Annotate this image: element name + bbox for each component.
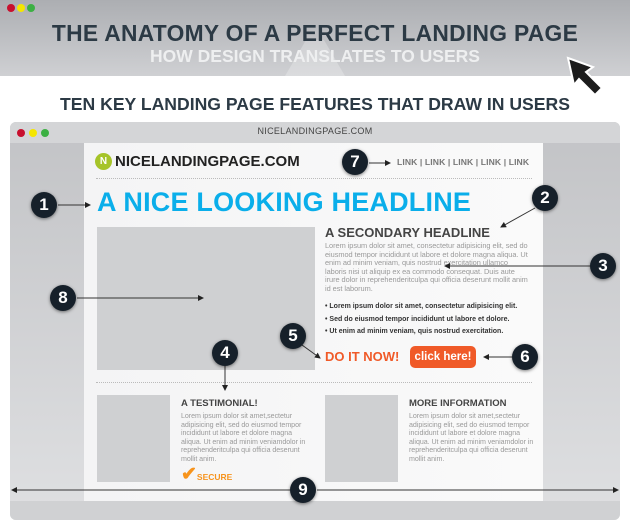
- badge 8: 8: [58, 288, 68, 307]
- runway: [285, 40, 345, 76]
- browser window: [10, 122, 620, 520]
- bullet list: • Sed do eiusmod tempor incididunt ut labore et dolore.: [325, 316, 509, 323]
- header band: [0, 0, 630, 76]
- badge 6: [512, 344, 538, 370]
- secure badge: ✔SECURE: [181, 464, 232, 485]
- secondary headline: A SECONDARY HEADLINE: [325, 225, 490, 240]
- testimonial: Lorem ipsum dolor sit amet,sectetur adipisicing elit, sed do eiusmod tempor incididunt ut labore et dolore magna aliqua. Ut enim ad minim veniamdolor in reprehenderitculpa qui officia deserunt mollit anim.: [181, 412, 305, 463]
- badge 2: 2: [540, 188, 550, 207]
- bottom bar: [10, 501, 620, 520]
- more information: MORE INFORMATION: [409, 398, 506, 409]
- nav links: LINK | LINK | LINK | LINK | LINK: [397, 157, 529, 167]
- title: THE ANATOMY OF A PERFECT LANDING PAGE: [52, 20, 578, 46]
- badge 5: [280, 323, 306, 349]
- testimonial: A TESTIMONIAL!: [181, 398, 258, 409]
- button: [410, 346, 476, 368]
- main headline: A NICE LOOKING HEADLINE: [97, 187, 471, 217]
- badge 3: 3: [598, 256, 608, 275]
- logo: N: [100, 156, 107, 167]
- more information: Lorem ipsum dolor sit amet,sectetur adipisicing elit, sed do eiusmod tempor incididunt ut labore et dolore magna aliqua. Ut enim ad minim veniamdolor in reprehenderitculpa qui officia deserunt mollit anim.: [409, 412, 533, 463]
- badge 5: 5: [288, 326, 298, 345]
- logo: NICELANDINGPAGE.COM: [115, 153, 300, 170]
- call to action text: DO IT NOW!: [325, 349, 399, 364]
- badge 1: [31, 192, 57, 218]
- bullet list: • Lorem ipsum dolor sit amet, consectetur adipisicing elit.: [325, 303, 517, 310]
- landing page panel: [84, 143, 543, 501]
- info image: [325, 395, 398, 482]
- icon: cursor arrow: [566, 56, 601, 94]
- badge 4: 4: [220, 343, 230, 362]
- browser bar: [10, 122, 620, 143]
- badge 7: [342, 149, 368, 175]
- hero image: [97, 227, 315, 370]
- bullet list: • Ut enim ad minim veniam, quis nostrud exercitation.: [325, 328, 503, 335]
- badge 6: 6: [520, 347, 530, 366]
- subtitle: HOW DESIGN TRANSLATES TO USERS: [150, 46, 480, 66]
- body text: Lorem ipsum dolor sit amet, consectetur adipisicing elit, sed do eiusmod tempor incididunt ut labore et dolore magna aliqua. Ut enim ad minim veniam, quis nostrud exercitation ullamco laboris nisi ut aliquip ex ea commodo consequat. Duis aute irure dolor in reprehenderitculpa qui officia deserunt mollit anim id est laborum.: [325, 241, 528, 292]
- badge 8: [50, 285, 76, 311]
- button: click here!: [415, 351, 471, 363]
- badge 9: [290, 477, 316, 503]
- badge 3: [590, 253, 616, 279]
- bullet list: [325, 302, 517, 335]
- badge 9: 9: [298, 480, 308, 499]
- badge 4: [212, 340, 238, 366]
- badge 1: 1: [39, 195, 49, 214]
- badge 2: [532, 185, 558, 211]
- badge 7: 7: [350, 152, 360, 171]
- section heading: TEN KEY LANDING PAGE FEATURES THAT DRAW IN USERS: [60, 94, 570, 114]
- browser bar: NICELANDINGPAGE.COM: [257, 126, 373, 136]
- testimonial image: [97, 395, 170, 482]
- window dots: [7, 4, 35, 12]
